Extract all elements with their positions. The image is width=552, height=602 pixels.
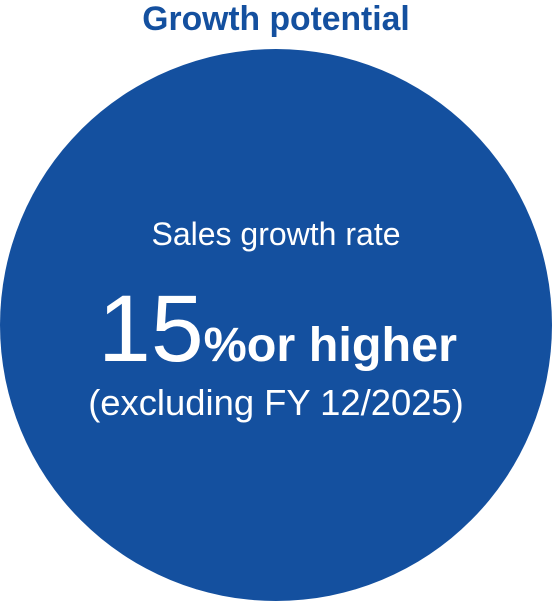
note: excluding FY 12/2025: (excluding FY 12/2025) [88,382,464,423]
figure: 15 percent or higher: 15%or higher [98,276,457,382]
title: Growth potential [142,0,410,38]
label: sales growth rate: Sales growth rate [151,216,400,252]
